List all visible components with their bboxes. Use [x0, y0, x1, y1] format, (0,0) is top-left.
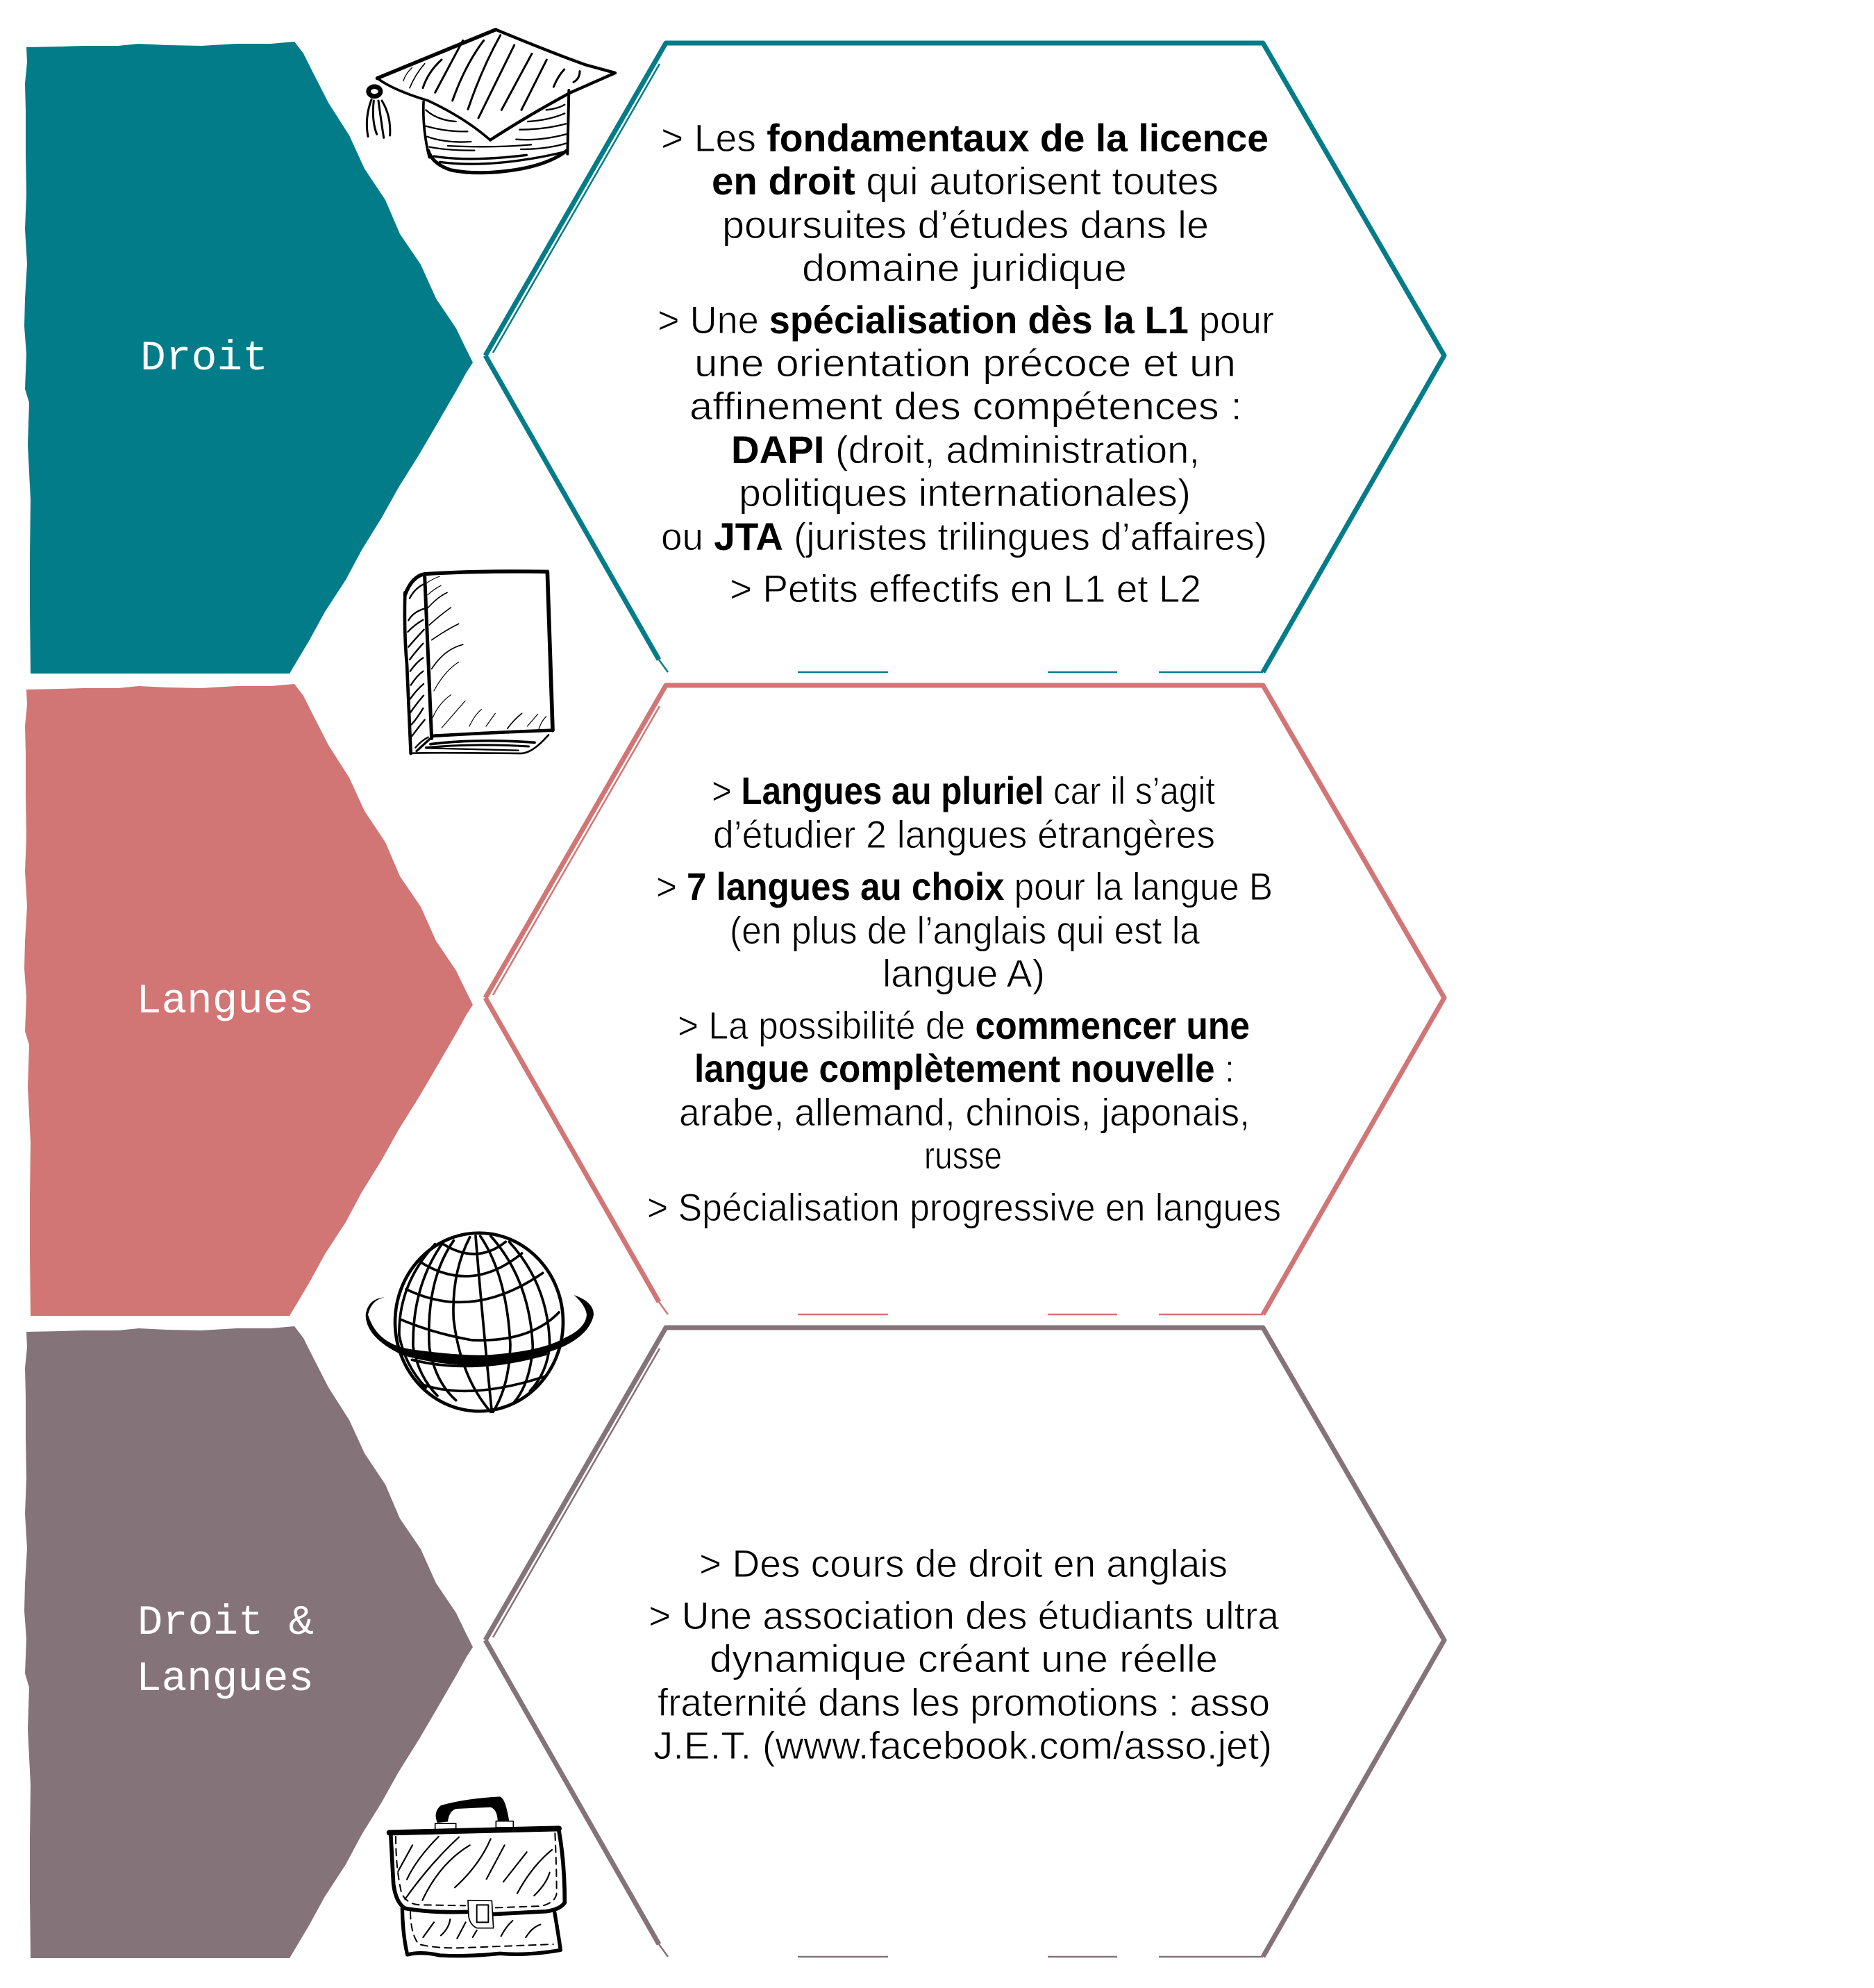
text block: Droit: politiques internationales) [739, 471, 1191, 515]
text block: Droit: ou JTA (juristes trilingues d’affaires) [661, 515, 1267, 558]
icon: book [405, 571, 553, 753]
hexagon outline: Langues [485, 685, 1444, 1314]
text block: Droit & Langues: > Une association des étudiants ultra [649, 1594, 1280, 1637]
text block: Droit & Langues: J.E.T. (www.facebook.com/asso.jet) [653, 1723, 1272, 1767]
text block: Droit: > Une spécialisation dès la L1 pour [658, 298, 1274, 342]
icon: graduation cap [367, 30, 615, 173]
text block: Langues: > Langues au pluriel car il s’agit [712, 769, 1215, 812]
text block: Droit & Langues: dynamique créant une réelle [710, 1637, 1218, 1680]
text block: Droit: > Les fondamentaux de la licence [661, 116, 1269, 160]
text block: Droit: poursuites d’études dans le [722, 203, 1209, 247]
chevron: Droit [24, 42, 473, 674]
label: Droit & Langues: Langues [136, 1656, 314, 1703]
text block: Langues: russe [924, 1133, 1002, 1177]
text block: Langues: > 7 langues au choix pour la langue B [656, 864, 1273, 908]
panel: Droit & Langues [24, 1326, 1444, 1958]
icon: briefcase [390, 1796, 564, 1956]
text block: Droit: en droit qui autorisent toutes [712, 159, 1219, 203]
chevron: Droit & Langues [24, 1326, 473, 1958]
text block: Langues: d’étudier 2 langues étrangères [713, 812, 1215, 856]
text block: Droit: affinement des compétences : [689, 384, 1242, 428]
text block: Droit: > Petits effectifs en L1 et L2 [730, 567, 1201, 610]
text block: Langues: (en plus de l’anglais qui est la [730, 908, 1200, 952]
panel: Droit [24, 30, 1444, 753]
panel: Langues [24, 684, 1444, 1412]
label: Droit & Langues [136, 1600, 314, 1703]
hexagon outline: Droit [485, 43, 1444, 672]
hexagon outline: Droit & Langues [485, 1328, 1444, 1957]
chevron: Langues [24, 684, 473, 1316]
text block: Droit & Langues [649, 1542, 1280, 1767]
icon: globe [366, 1233, 594, 1412]
text block: Langues: arabe, allemand, chinois, japonais, [679, 1090, 1250, 1134]
label: Droit: Droit [140, 335, 268, 383]
text block: Droit: domaine juridique [802, 246, 1127, 290]
text block: Droit: DAPI (droit, administration, [731, 428, 1200, 471]
text block: Langues [647, 769, 1281, 1229]
text block: Langues: langue A) [882, 951, 1045, 995]
text block: Droit: une orientation précoce et un [694, 341, 1236, 385]
text block: Droit & Langues: > Des cours de droit en anglais [699, 1542, 1228, 1585]
text block: Langues: langue complètement nouvelle : [694, 1046, 1235, 1090]
text block: Droit & Langues: fraternité dans les promotions : asso [658, 1680, 1270, 1724]
label: Langues: Langues [136, 978, 314, 1026]
text block: Langues: > La possibilité de commencer une [678, 1003, 1250, 1047]
text block: Droit [658, 116, 1274, 610]
label: Droit & Langues: Droit & [137, 1600, 314, 1647]
text block: Langues: > Spécialisation progressive en langues [647, 1185, 1281, 1229]
